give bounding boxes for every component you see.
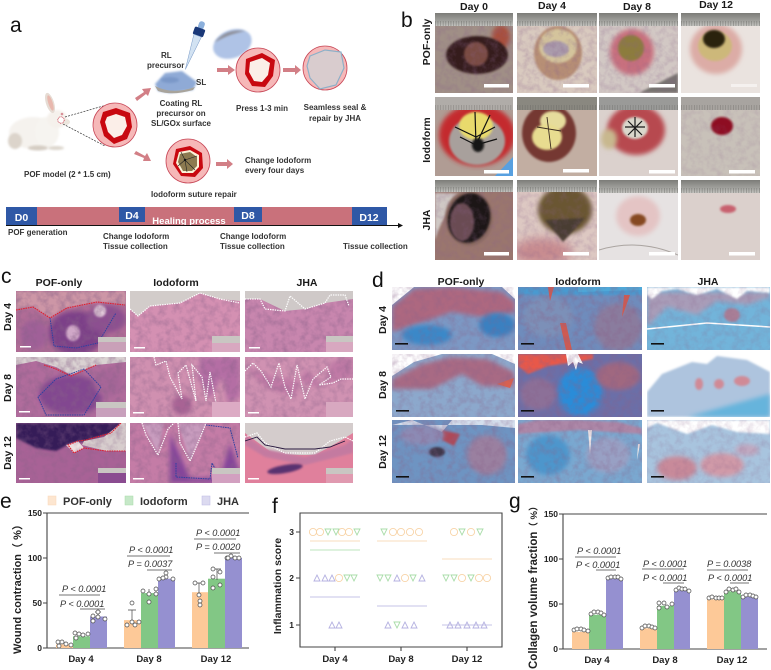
icon: POF wound circle — [93, 103, 137, 147]
arrow to seal — [283, 65, 301, 75]
column headings: Iodoform — [153, 277, 199, 289]
axes and ticks: 1 — [289, 620, 294, 630]
axes and ticks: 100 — [28, 553, 42, 563]
text labels of scheme: Seamless seal & — [304, 103, 367, 112]
y axis title: Collagen volume fraction（ %） — [528, 502, 540, 669]
icon: adhesive patch — [209, 23, 256, 64]
timeline notes: Tissue collection — [103, 242, 168, 251]
arrow to JHA route — [135, 88, 151, 101]
icon: sealed repair circle — [303, 46, 347, 90]
text labels of scheme: precursor — [147, 61, 184, 70]
data points — [56, 554, 241, 648]
photo: POF-only day 12 — [681, 13, 760, 93]
panel: d, Masson staining — [372, 269, 770, 483]
significance labels — [59, 528, 241, 609]
axes and ticks: Day 4 — [68, 654, 94, 665]
histology: POF-only day 4 — [16, 291, 126, 352]
axes and ticks: 150 — [28, 508, 42, 518]
row headings: Day 8 — [2, 374, 14, 402]
photo: Iodoform day 4 — [517, 97, 597, 176]
mean lines — [310, 541, 492, 625]
row headings: Day 12 — [377, 435, 389, 469]
text labels of scheme: Press 1-3 min — [236, 104, 288, 113]
dashed zoom lines — [63, 104, 110, 146]
axes and ticks: Day 4 — [584, 655, 610, 666]
row headings: Day 4 — [377, 306, 389, 334]
photo: JHA day 8 — [599, 180, 678, 260]
significance labels: P < 0.0001 — [576, 560, 620, 570]
panel: c, H&E histology — [1, 265, 353, 483]
scatter: green down triangles — [325, 529, 483, 628]
axes and ticks: 3 — [289, 527, 294, 537]
column headings: Day 4 — [538, 0, 566, 12]
axes and ticks — [28, 508, 249, 665]
row headings — [2, 303, 14, 470]
panel letter a: a — [10, 14, 22, 37]
timeline notes — [8, 228, 408, 251]
column headings — [460, 0, 733, 13]
panel: f, inflammation score chart — [272, 495, 502, 665]
y axis title: Wound contraction（ %） — [11, 519, 24, 654]
panel: e, wound contraction chart — [0, 490, 249, 665]
panel letter g: g — [509, 490, 521, 513]
axes and ticks: 100 — [544, 554, 558, 564]
histology: Iodoform day 12 — [130, 423, 240, 483]
timeline notes: Change Iodoform — [103, 232, 169, 241]
timeline: healing process: D12 — [359, 212, 379, 224]
axes and ticks: Day 12 — [452, 654, 482, 665]
panel letter b: b — [401, 9, 413, 32]
timeline: healing process: Healing process — [152, 216, 226, 227]
row headings: Day 12 — [2, 436, 14, 470]
icon: dropper — [180, 20, 208, 71]
text labels of scheme: every four days — [245, 166, 305, 175]
text labels of scheme: SL/GOx surface — [151, 119, 212, 128]
panel: b, wound photographs — [401, 0, 760, 266]
significance labels: P < 0.0001 — [643, 573, 687, 583]
significance labels: P < 0.0001 — [708, 573, 752, 583]
text labels of scheme: Change Iodoform — [245, 156, 311, 165]
data points — [572, 575, 758, 633]
photo: JHA day 0 — [435, 180, 513, 260]
text labels of scheme — [24, 51, 367, 199]
legend — [48, 496, 239, 508]
masson: Iodoform day 4 — [518, 287, 642, 350]
axes and ticks: Day 8 — [388, 654, 414, 665]
axes and ticks: Day 4 — [322, 654, 348, 665]
axes and ticks: Day 12 — [201, 654, 231, 665]
column headings: JHA — [296, 277, 318, 289]
arrow to change iodoform — [216, 159, 233, 169]
significance labels: P < 0.0001 — [62, 584, 106, 594]
text labels of scheme: Coating RL — [160, 99, 202, 108]
icon: iodoform suture circle — [166, 139, 210, 183]
axes and ticks: 2 — [289, 573, 294, 583]
column headings: POF-only — [36, 277, 82, 289]
photo: Iodoform day 0 — [435, 97, 513, 176]
histology: JHA day 4 — [245, 291, 353, 352]
scatter: orange circles — [309, 528, 491, 582]
scatter: purple up triangles — [314, 575, 487, 628]
text labels of scheme: Iodoform suture repair — [151, 190, 237, 199]
timeline: healing process — [6, 207, 403, 228]
axes and ticks — [544, 509, 767, 666]
icon: rabbit — [8, 92, 70, 150]
axes and ticks: 50 — [33, 598, 42, 608]
timeline: healing process: D4 — [125, 210, 139, 222]
column headings: JHA — [697, 276, 719, 288]
masson: POF-only day 8 — [392, 354, 515, 417]
panel: g, collagen volume chart — [509, 490, 767, 669]
axes and ticks: Day 12 — [717, 655, 747, 666]
y axis title: Inflammation score — [272, 538, 284, 634]
timeline: healing process: D8 — [241, 210, 255, 222]
error bars — [95, 569, 221, 622]
axes and ticks: 0 — [37, 643, 42, 653]
photo: Iodoform day 12 — [681, 97, 760, 176]
masson: Iodoform day 8 — [518, 354, 642, 417]
masson: JHA day 12 — [647, 420, 770, 483]
significance labels: P < 0.0001 — [643, 559, 687, 569]
significance labels: P < 0.0001 — [196, 528, 240, 538]
column headings: POF-only — [438, 276, 484, 288]
axes and ticks: 150 — [544, 509, 558, 519]
timeline notes: Tissue collection — [343, 242, 408, 251]
masson: POF-only day 12 — [392, 420, 515, 483]
axes and ticks: Day 8 — [652, 655, 678, 666]
column headings: Iodoform — [555, 276, 601, 288]
photo: JHA day 12 — [681, 180, 760, 260]
row headings: Day 8 — [377, 371, 389, 399]
significance labels: P < 0.0001 — [60, 599, 104, 609]
significance labels: P < 0.0001 — [129, 545, 173, 555]
masson: JHA day 8 — [647, 355, 770, 417]
panel letter f: f — [272, 495, 278, 518]
photo: Iodoform day 8 — [599, 97, 678, 176]
masson: POF-only day 4 — [392, 287, 515, 350]
histology: Iodoform day 8 — [130, 357, 240, 417]
timeline: healing process: D0 — [15, 212, 28, 224]
arrow to press — [217, 65, 235, 75]
histology: JHA day 12 — [245, 423, 353, 483]
text labels of scheme: RL — [161, 51, 172, 60]
text labels of scheme: precursor on — [156, 109, 206, 118]
panel letter d: d — [372, 269, 384, 292]
panel letter c: c — [1, 265, 12, 288]
axes and ticks — [289, 513, 502, 665]
photo: POF-only day 4 — [517, 13, 597, 93]
icon: press circle — [236, 48, 280, 92]
significance labels — [575, 546, 752, 583]
histology: JHA day 8 — [245, 357, 353, 417]
text labels of scheme: POF model (2 * 1.5 cm) — [24, 170, 111, 179]
column headings — [36, 277, 318, 289]
photo: JHA day 4 — [517, 180, 597, 260]
legend: Iodoform — [140, 496, 188, 508]
arrow to iodoform route — [134, 151, 151, 161]
panel letter e: e — [0, 490, 12, 513]
text labels of scheme: repair by JHA — [309, 114, 361, 123]
histology: POF-only day 8 — [16, 357, 126, 417]
column headings — [438, 276, 719, 288]
masson: Iodoform day 12 — [518, 420, 642, 483]
histology: POF-only day 12 — [16, 423, 126, 483]
photo: POF-only day 0 — [435, 13, 513, 93]
bars — [572, 579, 758, 649]
legend: JHA — [217, 496, 239, 508]
histology: Iodoform day 4 — [130, 291, 240, 352]
icon: SL patch with RL precursor — [155, 71, 197, 93]
axes and ticks: 0 — [553, 644, 558, 654]
bars — [56, 558, 242, 648]
row headings: Iodoform — [421, 117, 433, 163]
timeline notes: Tissue collection — [220, 242, 285, 251]
row headings: JHA — [421, 209, 433, 231]
column headings: Day 8 — [623, 1, 651, 13]
column headings: Day 0 — [460, 1, 488, 13]
significance labels: P = 0.0038 — [707, 559, 752, 569]
row headings — [377, 306, 389, 469]
significance labels: P < 0.0001 — [577, 546, 621, 556]
significance labels: P = 0.0020 — [196, 542, 241, 552]
row headings — [421, 19, 433, 231]
legend: POF-only — [63, 496, 113, 508]
axes and ticks: 50 — [549, 599, 558, 609]
panel: a, experimental scheme — [6, 14, 408, 251]
photo: POF-only day 8 — [599, 13, 678, 93]
timeline notes: POF generation — [8, 228, 68, 237]
timeline notes: Change Iodoform — [220, 232, 286, 241]
text labels of scheme: SL — [196, 78, 206, 87]
axes and ticks: Day 8 — [136, 654, 162, 665]
row headings: POF-only — [421, 19, 433, 65]
row headings: Day 4 — [2, 303, 14, 331]
masson: JHA day 4 — [647, 287, 770, 350]
significance labels: P = 0.0037 — [128, 559, 173, 569]
